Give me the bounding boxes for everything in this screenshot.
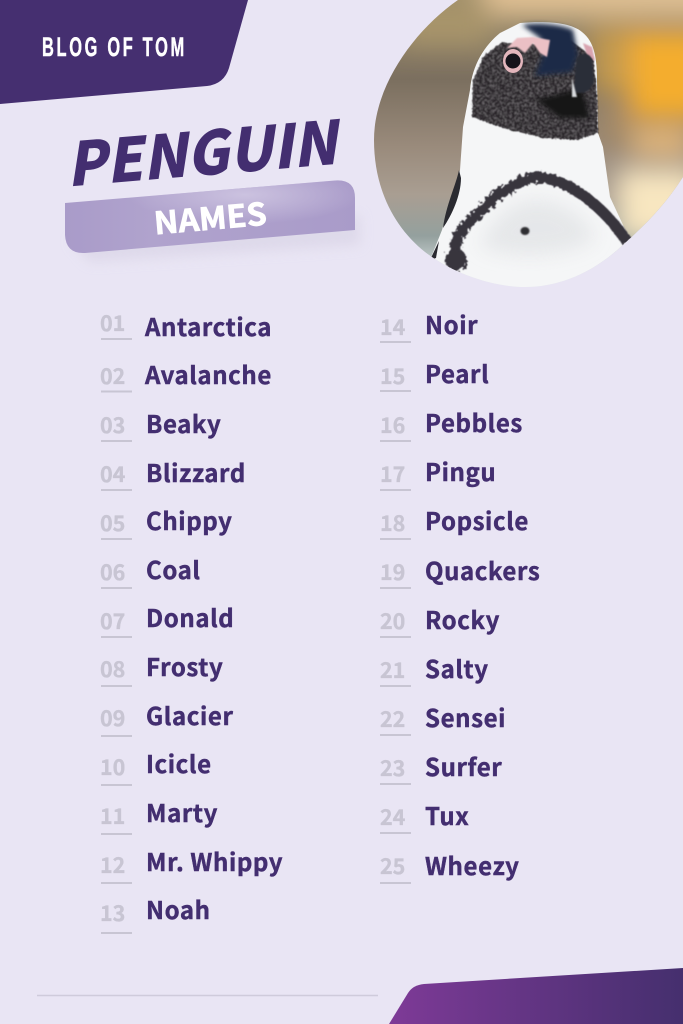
13 Noah: Noah (146, 891, 211, 926)
header banner: Blog of Tom (0, 0, 248, 104)
10 Icicle: Icicle (146, 745, 212, 780)
22 Sensei: Sensei (425, 699, 506, 734)
07 Donald (100, 599, 234, 637)
eye (503, 49, 523, 73)
names list: column 2 (380, 306, 540, 883)
19 Quackers: 19 (380, 556, 405, 587)
25 Wheezy: 25 (380, 850, 405, 881)
21 Salty (380, 650, 489, 686)
21 Salty: 21 (380, 654, 405, 685)
15 Pearl (380, 355, 489, 391)
10 Icicle (100, 745, 212, 785)
beak (574, 54, 594, 93)
04 Blizzard: Blizzard (146, 454, 246, 489)
15 Pearl: Pearl (425, 355, 489, 390)
17 Pingu: Pingu (425, 453, 496, 488)
06 Coal: 06 (100, 556, 125, 587)
20 Rocky (380, 601, 500, 637)
black back edge (443, 170, 461, 228)
23 Surfer: Surfer (425, 748, 502, 783)
13 Noah (100, 891, 211, 933)
names list: column 1 (100, 307, 283, 933)
08 Frosty: Frosty (146, 648, 223, 683)
25 Wheezy: Wheezy (425, 847, 520, 882)
08 Frosty (100, 648, 223, 686)
blue crown (522, 24, 578, 76)
19 Quackers: Quackers (425, 552, 540, 587)
05 Chippy: Chippy (146, 502, 232, 537)
09 Glacier: Glacier (146, 697, 234, 732)
07 Donald: 07 (100, 605, 125, 636)
04 Blizzard (100, 454, 246, 490)
12 Mr. Whippy: 12 (100, 849, 125, 880)
brand name: BLOG OF TOM (42, 32, 187, 62)
black face (472, 40, 598, 140)
05 Chippy (100, 502, 232, 539)
footer banner (389, 968, 683, 1024)
16 Pebbles (380, 404, 523, 441)
14 Noir: Noir (425, 306, 478, 341)
11 Marty: 11 (100, 800, 125, 831)
18 Popsicle: 18 (380, 507, 405, 538)
penguin body (432, 22, 630, 287)
03 Beaky (100, 405, 221, 441)
12 Mr. Whippy (100, 843, 283, 883)
14 Noir (380, 306, 478, 342)
belly shading (488, 202, 588, 254)
16 Pebbles: 16 (380, 409, 405, 440)
06 Coal (100, 551, 201, 588)
24 Tux: 24 (380, 801, 406, 832)
11 Marty (100, 794, 218, 834)
22 Sensei: 22 (380, 703, 405, 734)
18 Popsicle (380, 502, 529, 539)
01 Antarctica: 01 (100, 307, 125, 338)
22 Sensei (380, 699, 506, 735)
03 Beaky: Beaky (146, 405, 221, 440)
15 Pearl: 15 (380, 360, 405, 391)
05 Chippy: 05 (100, 507, 125, 538)
subtitle ribbon: Names (65, 180, 360, 262)
21 Salty: Salty (425, 650, 489, 685)
11 Marty: Marty (146, 794, 218, 829)
14 Noir: 14 (380, 311, 406, 342)
06 Coal: Coal (146, 551, 201, 586)
01 Antarctica: Antarctica (144, 308, 272, 343)
02 Avalanche: 02 (100, 360, 125, 391)
20 Rocky: 20 (380, 605, 405, 636)
08 Frosty: 08 (100, 653, 125, 684)
16 Pebbles: Pebbles (425, 404, 523, 439)
12 Mr. Whippy: Mr. Whippy (146, 843, 283, 878)
03 Beaky: 03 (100, 409, 125, 440)
photo: penguin in rounded blob (370, 0, 683, 300)
09 Glacier (100, 697, 234, 736)
23 Surfer (380, 748, 502, 784)
pink eye patches (507, 37, 550, 57)
23 Surfer: 23 (380, 752, 405, 783)
04 Blizzard: 04 (100, 458, 126, 489)
19 Quackers (380, 552, 540, 588)
belly spot (520, 227, 530, 235)
24 Tux (380, 797, 469, 833)
25 Wheezy (380, 847, 520, 883)
24 Tux: Tux (425, 797, 469, 832)
10 Icicle: 10 (100, 751, 125, 782)
chest band (456, 177, 628, 258)
07 Donald: Donald (146, 599, 234, 634)
dark throat (536, 88, 590, 118)
subtitle text: NAMES (152, 189, 268, 243)
title: Penguin: PENGUIN (62, 95, 345, 204)
02 Avalanche: Avalanche (144, 356, 272, 391)
09 Glacier: 09 (100, 702, 125, 733)
20 Rocky: Rocky (425, 601, 500, 636)
13 Noah: 13 (100, 897, 125, 928)
17 Pingu (380, 453, 496, 490)
18 Popsicle: Popsicle (425, 502, 529, 537)
17 Pingu: 17 (380, 458, 405, 489)
